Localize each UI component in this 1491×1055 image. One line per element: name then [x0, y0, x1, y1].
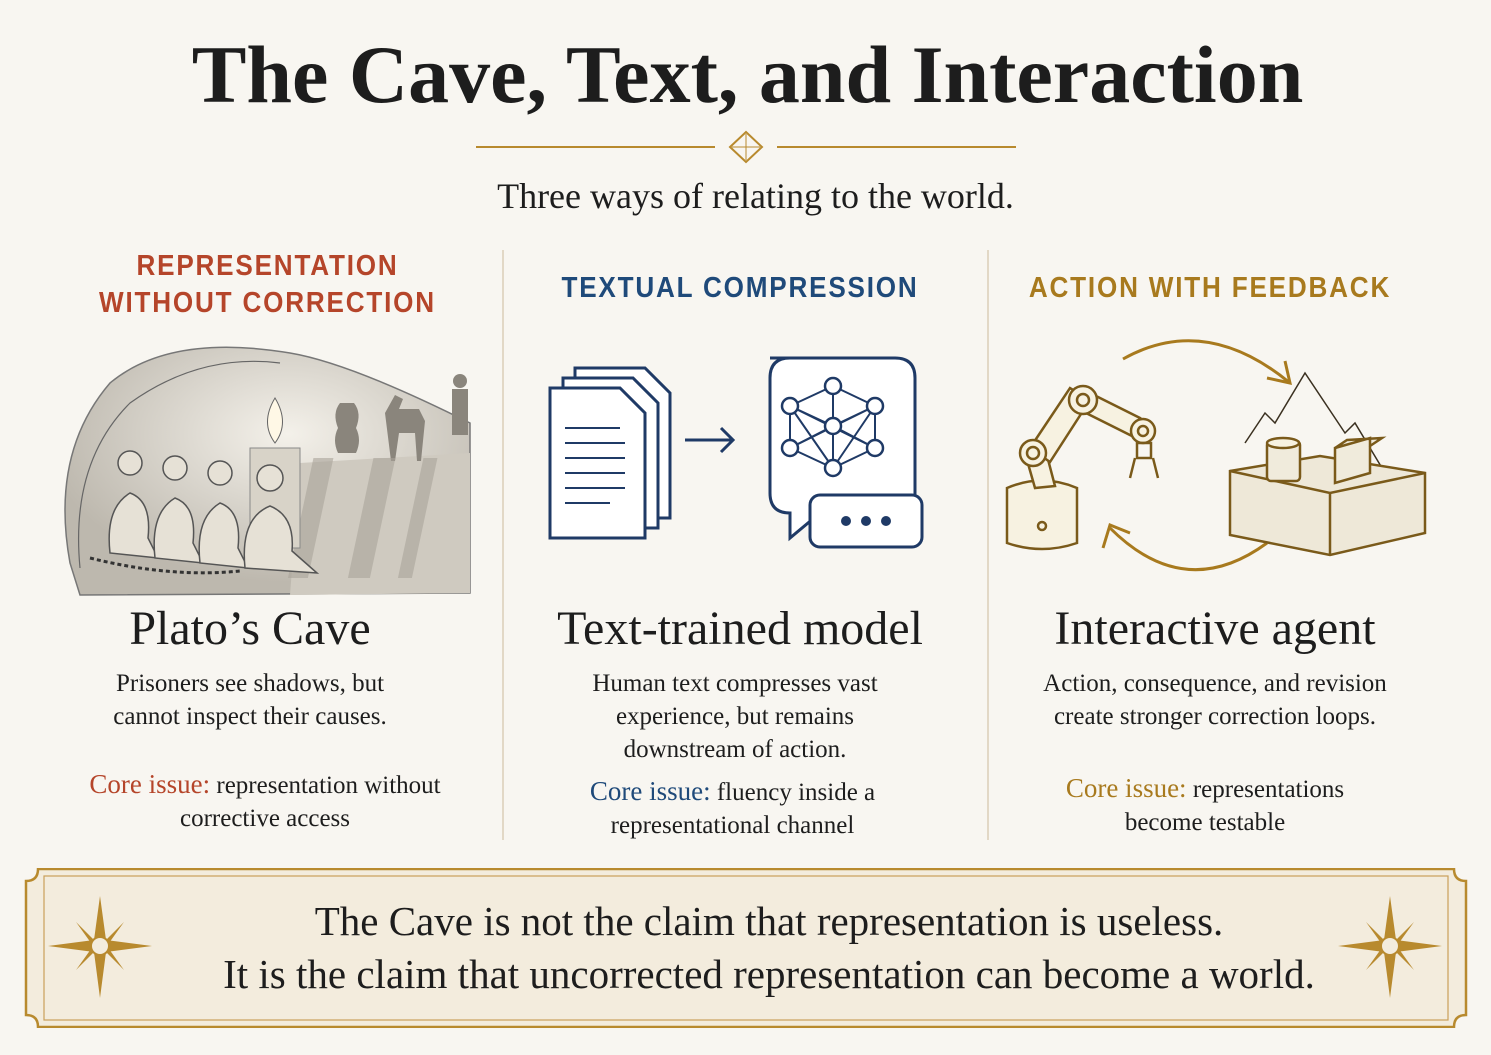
callout: bottom quote box — [24, 868, 1468, 1028]
core issue: Core issue: fluency inside a — [590, 776, 875, 806]
body text: cannot inspect their causes. — [113, 703, 387, 730]
body text — [113, 670, 387, 730]
heading blue: TEXTUAL COMPRESSION — [561, 272, 919, 304]
illustration: documents to network — [548, 356, 924, 548]
body text — [1043, 670, 1387, 730]
icon: compass star right — [1338, 896, 1442, 998]
heading red — [99, 250, 436, 319]
heading gold: ACTION WITH FEEDBACK — [1029, 272, 1391, 304]
core issue — [1066, 773, 1344, 836]
core issue: representational channel — [611, 812, 854, 839]
core issue: Core issue: representations — [1066, 773, 1344, 803]
heading red: REPRESENTATION — [136, 250, 399, 282]
heading red: WITHOUT CORRECTION — [99, 287, 436, 319]
title: Plato's Cave: Plato’s Cave — [129, 602, 371, 655]
panel: Text-trained model — [548, 272, 924, 839]
body text: create stronger correction loops. — [1054, 703, 1376, 730]
icon: compass star left — [48, 896, 152, 998]
illustration: robot arm and loop — [1006, 339, 1426, 572]
quote text — [223, 898, 1315, 997]
core issue — [89, 769, 441, 832]
title: The Cave, Text, and Interaction — [192, 29, 1303, 120]
body text: downstream of action. — [624, 736, 846, 763]
quote text: It is the claim that uncorrected representation can become a world. — [223, 951, 1315, 997]
core issue: become testable — [1125, 809, 1285, 836]
panel: Plato's Cave — [64, 250, 471, 832]
body text: experience, but remains — [616, 703, 854, 730]
column dividers — [502, 250, 504, 840]
panel: Interactive agent — [1006, 272, 1426, 836]
illustration: cave — [64, 346, 471, 596]
body text: Human text compresses vast — [592, 670, 878, 697]
body text — [592, 670, 878, 763]
core issue — [590, 776, 875, 839]
title: Text-trained model: Text-trained model — [557, 602, 923, 655]
divider ornament — [476, 130, 1016, 164]
subtitle: Three ways of relating to the world. — [497, 176, 1014, 216]
body text: Prisoners see shadows, but — [116, 670, 384, 697]
core issue: corrective access — [180, 805, 350, 832]
title: Interactive agent: Interactive agent — [1054, 602, 1376, 655]
body text: Action, consequence, and revision — [1043, 670, 1387, 697]
quote text: The Cave is not the claim that representation is useless. — [315, 898, 1223, 944]
core issue: Core issue: representation without — [89, 769, 441, 799]
